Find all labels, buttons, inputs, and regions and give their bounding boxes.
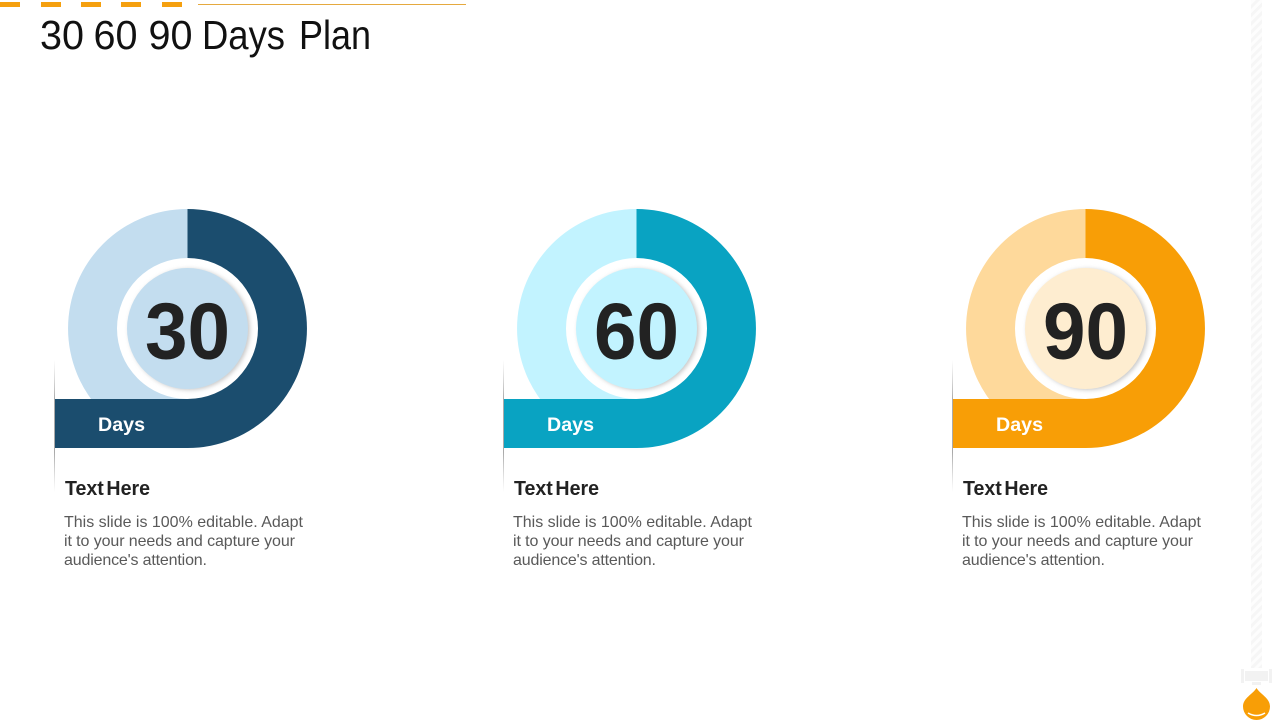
description: audience's attention. — [513, 552, 656, 569]
title: 90 — [148, 12, 192, 58]
description: This slide is 100% editable. Adapt — [64, 514, 304, 531]
accent line — [952, 360, 953, 492]
center disc — [1025, 268, 1146, 389]
description — [962, 514, 1202, 569]
center shadow — [1027, 269, 1148, 390]
title: Plan — [299, 12, 371, 58]
heading: Text Here — [514, 477, 599, 500]
number: 60 — [594, 286, 679, 376]
description: audience's attention. — [64, 552, 207, 569]
description — [64, 514, 304, 569]
panel: 60 days — [503, 209, 756, 569]
progress ring with days band — [55, 209, 307, 448]
light ring — [68, 209, 188, 448]
title: 60 — [94, 12, 138, 58]
description: This slide is 100% editable. Adapt — [513, 514, 753, 531]
panel: 90 days — [952, 209, 1205, 569]
title: 30 — [40, 12, 84, 58]
description: it to your needs and capture your — [962, 533, 1194, 550]
description: it to your needs and capture your — [64, 533, 296, 550]
panel: 30 days — [54, 209, 307, 569]
description — [513, 514, 753, 569]
center disc — [576, 268, 697, 389]
right decorative strip — [1251, 0, 1262, 668]
light ring — [517, 209, 636, 448]
center disc — [127, 268, 248, 389]
center shadow — [129, 269, 250, 390]
number: 30 — [145, 286, 230, 376]
accent line — [503, 360, 504, 492]
number: 90 — [1043, 286, 1128, 376]
days label: Days — [547, 415, 594, 436]
light ring — [966, 209, 1086, 448]
description: This slide is 100% editable. Adapt — [962, 514, 1202, 531]
days label: Days — [98, 415, 145, 436]
title: Days — [202, 12, 285, 58]
progress ring with days band — [953, 209, 1205, 448]
header rule — [198, 4, 466, 5]
progress ring with days band — [504, 209, 756, 448]
heading: Text Here — [65, 477, 150, 500]
center shadow — [578, 269, 699, 390]
description: audience's attention. — [962, 552, 1105, 569]
heading: Text Here — [963, 477, 1048, 500]
icon: orange drop — [1243, 688, 1270, 720]
accent line — [54, 360, 55, 492]
description: it to your needs and capture your — [513, 533, 745, 550]
days label: Days — [996, 415, 1043, 436]
icon: strip clamp — [1241, 669, 1272, 685]
title — [40, 12, 371, 58]
header dashes — [0, 2, 182, 7]
